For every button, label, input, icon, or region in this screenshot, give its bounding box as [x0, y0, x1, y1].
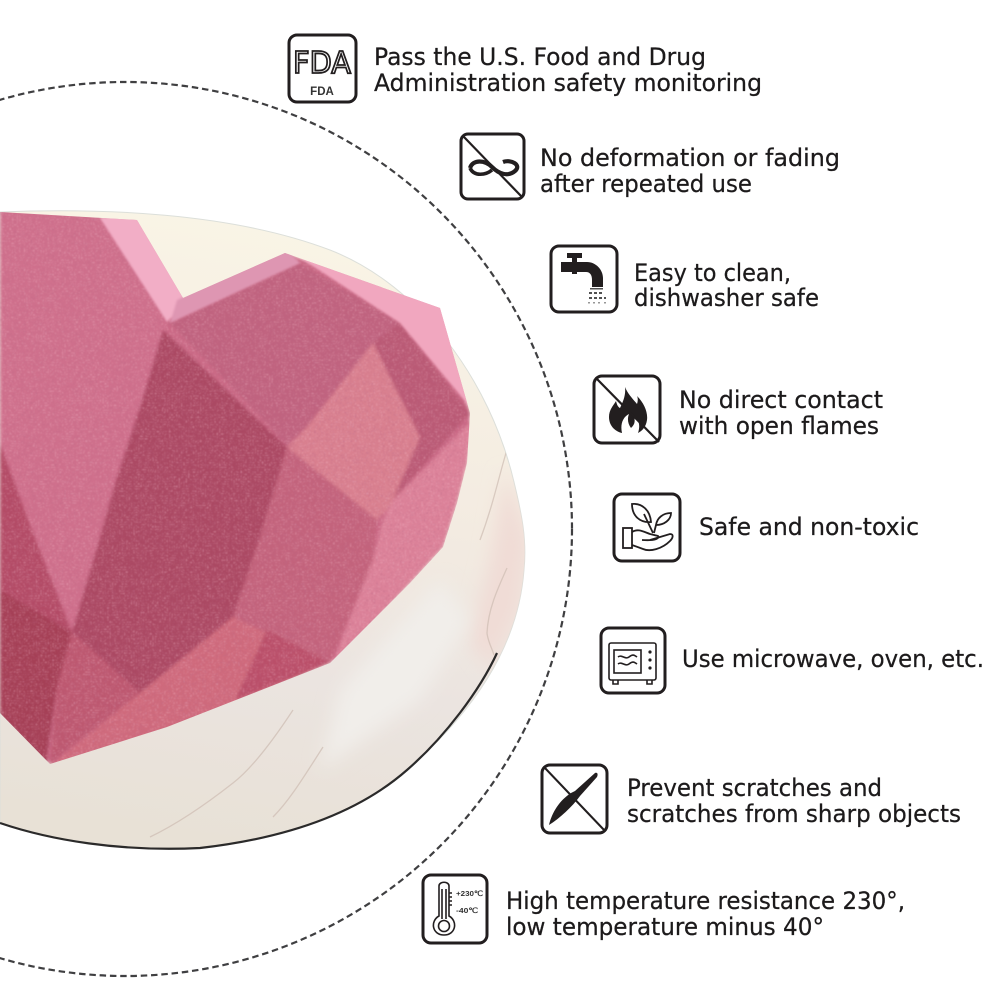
facet: light top right — [302, 259, 468, 404]
facet: far right — [330, 418, 475, 670]
text: No deformation or fading — [540, 144, 840, 172]
facet: lower middle — [233, 447, 377, 663]
feature 5: safe — [614, 494, 919, 561]
icon: thermometer — [423, 875, 487, 943]
icon: crossed infinity — [461, 134, 524, 199]
text — [634, 259, 819, 312]
text: Use microwave, oven, etc. — [682, 645, 984, 673]
text: Easy to clean, — [634, 259, 791, 287]
feature 7: no scratches — [542, 765, 961, 833]
facet: light top edge — [170, 248, 300, 323]
dashed circle — [0, 82, 572, 976]
heart grain dark — [0, 212, 470, 764]
feature 8: temperature — [423, 875, 905, 943]
feature 3: easy to clean — [551, 246, 819, 312]
text — [679, 386, 883, 440]
icon: crossed flame — [594, 376, 660, 443]
facet: left dark — [0, 443, 72, 632]
light smooth facets — [100, 215, 475, 413]
icon: FDA: FDA — [310, 86, 334, 98]
heart grain light — [0, 212, 470, 764]
text: High temperature resistance 230°, — [506, 887, 905, 915]
text: No direct contact — [679, 386, 883, 414]
text: low temperature minus 40° — [506, 913, 824, 941]
icon: plant in hand — [614, 494, 680, 561]
icon: FDA: FDA — [293, 46, 351, 81]
feature 1: FDA — [289, 35, 762, 102]
text — [627, 774, 961, 828]
text: with open flames — [679, 412, 879, 440]
heart — [0, 205, 475, 770]
text: after repeated use — [540, 170, 752, 198]
facet: bottom centre — [50, 632, 140, 764]
text: scratches from sharp objects — [627, 800, 961, 828]
facet: light top left — [100, 215, 190, 322]
text — [506, 887, 905, 941]
feature 6: microwave — [601, 628, 984, 693]
icon: FDA — [289, 35, 356, 102]
heart silhouette — [45, 218, 470, 764]
text: Administration safety monitoring — [374, 69, 762, 97]
facet: top right lobe — [170, 263, 400, 445]
text — [540, 144, 840, 198]
icon: faucet — [551, 246, 617, 312]
plate rim — [0, 653, 497, 849]
feature 4: no flames — [594, 376, 883, 443]
icon: thermometer: -40℃ — [456, 906, 479, 915]
facet: bottom right dark — [235, 630, 330, 700]
facet: centre dark — [72, 330, 287, 693]
photo: plate with diamond heart mousse — [0, 205, 530, 849]
facet: right dark — [373, 323, 470, 500]
icon: crossed knife — [542, 765, 607, 833]
facet: bottom left — [0, 590, 72, 765]
icon: thermometer: +230℃ — [456, 889, 484, 898]
facet: right band — [287, 343, 420, 520]
textured facets — [0, 205, 475, 770]
feature 2: no deformation — [461, 134, 840, 199]
icon: microwave — [601, 628, 665, 693]
facet: bottom band — [45, 617, 330, 770]
text: Prevent scratches and — [627, 774, 882, 802]
text: Pass the U.S. Food and Drug — [374, 43, 706, 71]
text: dishwasher safe — [634, 284, 819, 312]
plate — [0, 211, 530, 849]
facet: top left lobe — [0, 212, 102, 220]
text: Safe and non-toxic — [699, 513, 919, 541]
text — [374, 43, 762, 97]
